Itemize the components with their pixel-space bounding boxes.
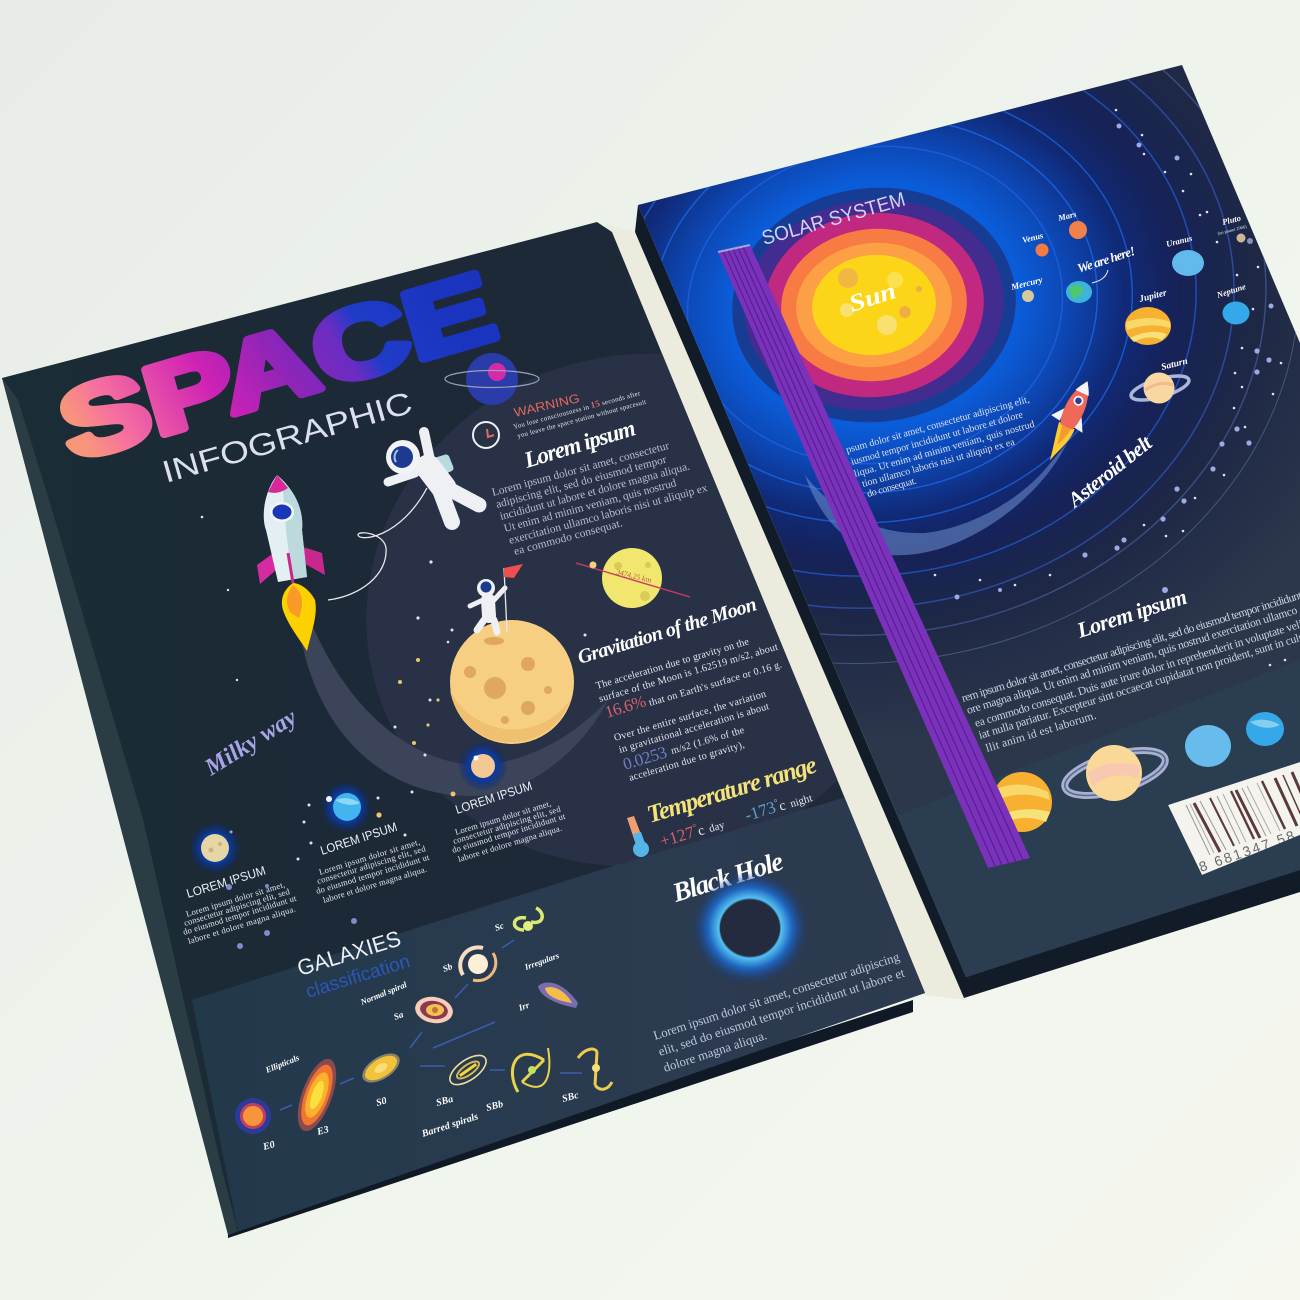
planet: Mercury <box>1009 274 1045 302</box>
label: Sun: Sun <box>846 278 900 318</box>
gap between notebooks <box>605 224 965 1000</box>
galaxy labels: SBb <box>485 1099 504 1114</box>
subheading: classification: classification <box>303 951 413 1003</box>
label group: left <box>182 864 298 946</box>
text block: black hole: elit, sed do eiusmod tempor incididunt ut labore et <box>657 966 907 1059</box>
planet: Venus: Venus <box>1021 230 1045 245</box>
temperature values: c <box>696 823 707 839</box>
galaxy: Sb <box>460 947 496 981</box>
galaxy: SBc <box>578 1049 612 1089</box>
elastic band <box>718 245 1030 868</box>
galaxy: Sa <box>413 994 455 1026</box>
label group: right: labore et dolore magna aliqua. <box>457 823 563 864</box>
text block: gravitation: 0.0253 <box>621 742 669 774</box>
text block: lower body: llit anim id est laborum. <box>984 709 1098 755</box>
bottom planet: Jupiter <box>992 772 1052 832</box>
label group: left: consectetur adipiscing elit, sed <box>183 886 291 928</box>
label group: left: Lorem ipsum dolor sit amet, <box>185 879 286 919</box>
planet: Venus <box>1021 230 1048 256</box>
text block: solar system intro: iusmod tempor incididunt ut labore et dolore <box>850 409 1025 468</box>
text block: gravitation: m/s2 (1.6% of the <box>670 725 746 757</box>
barcode <box>1168 762 1300 875</box>
subtitle: INFOGRAPHIC: INFOGRAPHIC <box>158 385 416 490</box>
planet: Pluto <box>1217 213 1253 244</box>
galaxy: SBa <box>445 1050 491 1090</box>
icon: thermometer <box>627 816 649 857</box>
orbit rings <box>644 70 1296 664</box>
temperature values: -173 <box>743 798 778 825</box>
text block: lower body: ea commodo consequat. Duis aute irure dolor in reprehenderit in voluptate velit <box>973 616 1300 730</box>
swoosh <box>805 443 1067 555</box>
label group: middle <box>315 820 431 905</box>
planet: Jupiter <box>1125 288 1171 345</box>
warning text: You lose consciousness in 15 seconds after <box>512 387 642 431</box>
icon: black hole <box>692 872 808 984</box>
galaxy: E3 <box>290 1054 344 1136</box>
icon: floating astronaut <box>328 432 479 600</box>
text block: lower body <box>960 588 1300 755</box>
text block: gravitation: in gravitational acceleration is about <box>618 701 771 756</box>
asteroid dots <box>934 109 1286 666</box>
label group: right: do eiusmod tempor incididunt ut <box>451 811 567 855</box>
galaxy labels: Barred spirals <box>420 1111 480 1140</box>
galaxy labels: Sc <box>493 920 505 933</box>
planet: Mercury: Mercury <box>1009 274 1045 292</box>
text block: black hole: Lorem ipsum dolor sit amet, consectetur adipiscing <box>652 950 902 1043</box>
text block: gravitation <box>595 636 783 784</box>
label group: left: LOREM IPSUM <box>185 864 267 901</box>
text block: black hole: dolore magna aliqua. <box>662 1028 769 1075</box>
text block: intro: ea commodo consequat. <box>513 517 624 558</box>
temperature values <box>658 786 814 851</box>
heading: Lorem ipsum: Lorem ipsum <box>520 415 638 473</box>
label group: right <box>451 779 567 864</box>
label group: middle: LOREM IPSUM <box>319 820 399 858</box>
label group: middle: consectetur adipiscing elit, sed <box>316 843 427 886</box>
bottom planet: Neptune <box>1246 712 1284 746</box>
warning text: you leave the space station without spacesuit <box>517 399 647 440</box>
sun rings <box>732 188 1016 422</box>
icon: ringed planet <box>445 353 539 405</box>
label group: left: labore et dolore magna aliqua. <box>187 904 297 946</box>
label group: middle: do eiusmod tempor incididunt ut <box>315 852 431 896</box>
temperature values: ° <box>773 797 780 809</box>
temperature values: night <box>789 792 814 810</box>
barcode: 8 681347 58 <box>1197 827 1297 875</box>
label group: middle: labore et dolore magna aliqua. <box>322 864 428 905</box>
galaxy labels: SBa <box>435 1094 454 1109</box>
title: SPACE: SPACE <box>47 251 506 481</box>
text block: gravitation: acceleration due to gravity), <box>628 739 746 784</box>
text block: gravitation: The acceleration due to gravity on the <box>595 636 751 692</box>
galaxy labels: Sa <box>392 1009 405 1022</box>
label group: right: consectetur adipiscing elit, sed <box>452 803 562 846</box>
galaxy: SBb <box>512 1048 549 1092</box>
bottom planet: Saturn <box>1060 741 1170 805</box>
galaxy labels: SBc <box>561 1090 580 1105</box>
text block: intro: exercitation ullamco laboris nisi ut aliquip ex <box>508 482 709 547</box>
text block: solar system intro: liqua. Ut enim ad minim veniam, quis nostrud <box>853 419 1036 480</box>
galaxy labels: Normal spiral <box>358 979 409 1007</box>
planet: Mars <box>1056 209 1087 239</box>
text block: solar system intro <box>845 394 1036 500</box>
galaxy labels: E3 <box>315 1124 330 1138</box>
icon: rocket with flame <box>257 475 325 651</box>
text block: solar system intro: do consequat. <box>866 476 918 500</box>
planet: Earth with label: We are here! <box>1075 243 1137 276</box>
temperature values: day <box>707 819 727 835</box>
planet: Earth with label <box>1066 243 1137 303</box>
text block: gravitation: that on Earth's surface or 0.16 g. <box>648 659 783 709</box>
planet: Pluto: (no planet 2006) <box>1217 224 1248 236</box>
heading: Lorem ipsum: Lorem ipsum <box>1073 584 1190 643</box>
galaxy labels: Irregulars <box>522 950 561 972</box>
text block: lower body: ore magna aliqua. Ut enim ad minim veniam, quis nostrud exercitation ullamco <box>965 604 1299 717</box>
label group: left: do eiusmod tempor incididunt ut <box>182 893 298 937</box>
planet: Saturn <box>1129 357 1191 405</box>
text block: solar system intro: psum dolor sit amet, consectetur adipiscing elit, <box>845 394 1031 456</box>
galaxy labels: E0 <box>261 1139 276 1153</box>
stars <box>201 516 586 949</box>
planet: Uranus: Uranus <box>1165 233 1194 249</box>
text block: gravitation: 16.6% <box>603 691 648 722</box>
heading: Gravitation of the Moon: Gravitation of the Moon <box>575 593 759 669</box>
small moon with diameter line: 3474,25 km <box>616 567 653 585</box>
temperature values: ° <box>691 822 699 834</box>
heading: Temperature range: Temperature range <box>644 751 820 829</box>
galaxy connectors <box>280 940 582 1110</box>
planet: middle <box>321 782 382 832</box>
icon: small rocket <box>1033 373 1103 468</box>
planet: Neptune <box>1215 281 1250 324</box>
planet: Saturn: Saturn <box>1160 357 1189 373</box>
galaxy labels: Irr <box>516 1000 531 1013</box>
heading: Black Hole: Black Hole <box>668 846 787 908</box>
label group: right: LOREM IPSUM <box>454 779 534 817</box>
heading: GALAXIES: GALAXIES <box>294 926 404 981</box>
text block: gravitation: surface of the Moon is 1.62519 m/s2, about <box>598 642 779 705</box>
planet: Uranus <box>1165 233 1204 276</box>
text block: intro <box>491 440 709 558</box>
text block: intro: adipiscing elit, sed do eiusmod tempor <box>495 454 668 511</box>
temperature values: c <box>777 798 788 815</box>
galaxy: S0 <box>357 1048 405 1088</box>
label group: right: Lorem ipsum dolor sit amet, <box>454 798 552 837</box>
galaxy labels: Ellipticals <box>263 1052 301 1075</box>
planet: Pluto: Pluto <box>1221 213 1242 227</box>
text block: gravitation: Over the entire surface, the variation <box>613 689 767 744</box>
text block: intro: incididunt ut labore et dolore magna aliqua. <box>499 461 691 523</box>
text block: intro: Ut enim ad minim veniam, quis nostrud <box>503 477 678 535</box>
heading: SOLAR SYSTEM: SOLAR SYSTEM <box>759 189 908 250</box>
planet: left <box>190 823 240 873</box>
notebook: right cover <box>635 65 1300 998</box>
notebook: left cover <box>2 222 972 1240</box>
planet: Mars: Mars <box>1056 209 1078 223</box>
warning text: WARNING <box>513 391 581 420</box>
galaxy: E0 <box>235 1098 271 1134</box>
big moon with standing astronaut <box>450 564 574 744</box>
small moon with diameter line <box>576 548 690 608</box>
planet: Jupiter: Jupiter <box>1137 288 1168 305</box>
text block: solar system intro: tion ullamco laboris nisi ut aliquip ex ea <box>861 437 1017 490</box>
planet: Neptune: Neptune <box>1215 281 1247 300</box>
galaxy: Sc <box>514 908 542 931</box>
text block: lower body: rem ipsum dolor sit amet, consectetur adipiscing elit, sed do eiusmod tempor incididunt <box>960 588 1300 705</box>
heading: Milky way: Milky way <box>200 704 302 782</box>
bottom planet: Uranus <box>1185 725 1231 767</box>
label: Asteroid belt: Asteroid belt <box>1062 430 1157 513</box>
galaxy: Irr <box>538 983 578 1008</box>
text block: intro: Lorem ipsum dolor sit amet, consectetur <box>491 440 671 499</box>
galaxy labels <box>261 920 580 1153</box>
temperature values: +127 <box>658 822 697 851</box>
icon: clock <box>473 422 499 448</box>
label group: middle: Lorem ipsum dolor sit amet, <box>318 837 421 877</box>
galaxy labels: Sb <box>441 961 454 974</box>
planet: right <box>459 742 507 790</box>
galaxy labels: S0 <box>375 1096 388 1109</box>
